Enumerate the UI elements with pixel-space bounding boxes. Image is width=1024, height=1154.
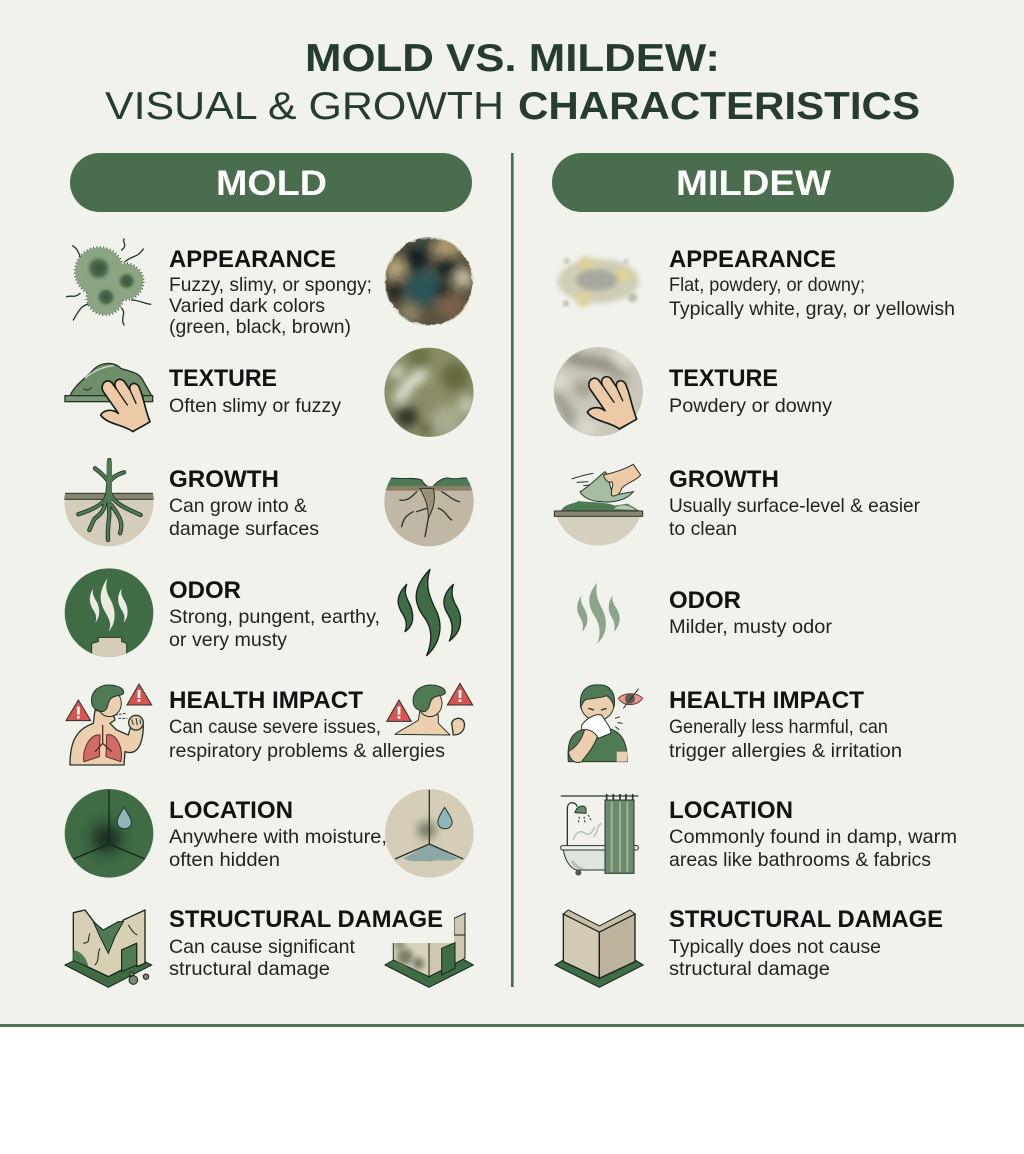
mildew texture text: Powdery or downy [669, 395, 832, 417]
row: mold growth [64, 460, 475, 550]
growth text [169, 466, 319, 540]
mildew odor text: ODOR [669, 587, 741, 614]
row: mildew structural damage [555, 906, 943, 987]
icon: person coughing shoulders [387, 683, 473, 735]
mildew texture text: TEXTURE [669, 365, 778, 392]
health impact text: respiratory problems & allergies [169, 740, 445, 762]
icon: intact walls [555, 910, 643, 987]
mildew health text: Generally less harmful, can [669, 716, 888, 738]
icon: powdery patch [558, 256, 639, 307]
title [105, 37, 920, 128]
odor text: or very musty [169, 629, 287, 651]
mildew structural text: Typically does not cause [669, 936, 881, 958]
photo: slimy mold texture [384, 345, 475, 438]
mildew odor text: Milder, musty odor [669, 616, 833, 638]
mildew header pill: MILDEW [676, 164, 831, 203]
mildew location text: areas like bathrooms & fabrics [669, 849, 931, 871]
mildew health text: trigger allergies & irritation [669, 740, 902, 762]
odor text: Strong, pungent, earthy, [169, 606, 380, 628]
column divider [511, 153, 514, 987]
footer rule [0, 1024, 1024, 1027]
icon: damp corner with puddle [385, 789, 474, 878]
structural damage text: STRUCTURAL DAMAGE [169, 906, 443, 933]
icon: hand on powdery surface [553, 346, 643, 437]
row: mildew location [561, 794, 957, 876]
row: mold structural damage [65, 905, 473, 987]
location text: often hidden [169, 849, 280, 871]
icon: mold colony [67, 239, 151, 325]
growth text: GROWTH [169, 466, 279, 493]
title: CHARACTERISTICS [518, 85, 920, 128]
icon: odor disc [65, 568, 153, 658]
mildew structural text [669, 906, 943, 980]
location text: Anywhere with moisture, [169, 826, 387, 848]
mildew growth text: GROWTH [669, 466, 779, 493]
icon: bathtub with shower curtain [561, 794, 638, 876]
mildew growth text: to clean [669, 518, 737, 540]
row: mildew odor [577, 583, 833, 643]
icon: dark damp corner [65, 789, 153, 878]
structural damage text: Can cause significant [169, 936, 356, 958]
odor text [169, 577, 380, 651]
mildew location text: Commonly found in damp, warm [669, 826, 957, 848]
appearance text: (green, black, brown) [169, 316, 351, 338]
heading backdrop patch [377, 905, 454, 943]
row: mold location [65, 789, 474, 878]
location text: LOCATION [169, 797, 293, 824]
icon: hand on slimy mound [65, 363, 153, 432]
texture text [169, 365, 341, 417]
mold header pill: MOLD [216, 164, 327, 203]
icon: wiping surface moss [553, 464, 643, 548]
growth text: Can grow into & [169, 495, 307, 517]
row: mildew health impact [568, 685, 902, 762]
mildew header pill [552, 153, 954, 212]
mildew growth text [669, 466, 920, 540]
icon: faint odor wisps [577, 583, 620, 643]
icon: mold-stained wall [385, 913, 473, 987]
row: mildew appearance [558, 246, 955, 320]
row: mildew texture [553, 346, 832, 437]
mildew appearance text: Flat, powdery, or downy; [669, 274, 865, 296]
mildew odor text [669, 587, 833, 638]
health impact text: Can cause severe issues, [169, 716, 381, 738]
row: mold appearance [67, 235, 473, 338]
mildew appearance text: Typically white, gray, or yellowish [669, 298, 955, 320]
location text [169, 797, 387, 871]
row: mold texture [65, 345, 475, 438]
appearance text [169, 246, 372, 338]
mildew appearance text: APPEARANCE [669, 246, 836, 273]
mildew growth text: Usually surface-level & easier [669, 495, 920, 517]
icon: strong odor wisps [398, 569, 461, 656]
icon: cracked walls [65, 910, 152, 987]
icon: person sneezing into tissue [568, 685, 643, 762]
odor text: ODOR [169, 577, 241, 604]
mildew structural text: structural damage [669, 958, 830, 980]
texture text: TEXTURE [169, 365, 277, 392]
health impact text [169, 687, 445, 762]
structural damage text [169, 906, 443, 980]
mildew appearance text [669, 246, 955, 320]
mildew health text [669, 687, 902, 762]
mold header pill [70, 153, 472, 212]
growth text: damage surfaces [169, 518, 319, 540]
texture text: Often slimy or fuzzy [169, 395, 341, 417]
appearance text: Varied dark colors [169, 295, 325, 317]
row: mold odor [65, 568, 461, 658]
row: mold health impact [66, 683, 473, 765]
icon: cracked surface [383, 478, 475, 550]
mildew health text: HEALTH IMPACT [669, 687, 864, 714]
mildew structural text: STRUCTURAL DAMAGE [669, 906, 943, 933]
title: MOLD VS. MILDEW: [305, 37, 720, 80]
icon: roots in surface [64, 460, 154, 548]
mildew texture text [669, 365, 832, 417]
panel: mildew column [552, 153, 957, 987]
icon: person coughing with lungs [66, 684, 152, 765]
panel: mold column [64, 153, 475, 987]
appearance text: Fuzzy, slimy, or spongy; [169, 274, 372, 296]
health impact text: HEALTH IMPACT [169, 687, 363, 714]
mildew location text: LOCATION [669, 797, 793, 824]
row: mildew growth [553, 464, 920, 548]
photo: mold colonies [384, 235, 473, 325]
mildew location text [669, 797, 957, 871]
appearance text: APPEARANCE [169, 246, 336, 273]
structural damage text: structural damage [169, 958, 330, 980]
title: VISUAL & GROWTH [105, 85, 504, 128]
